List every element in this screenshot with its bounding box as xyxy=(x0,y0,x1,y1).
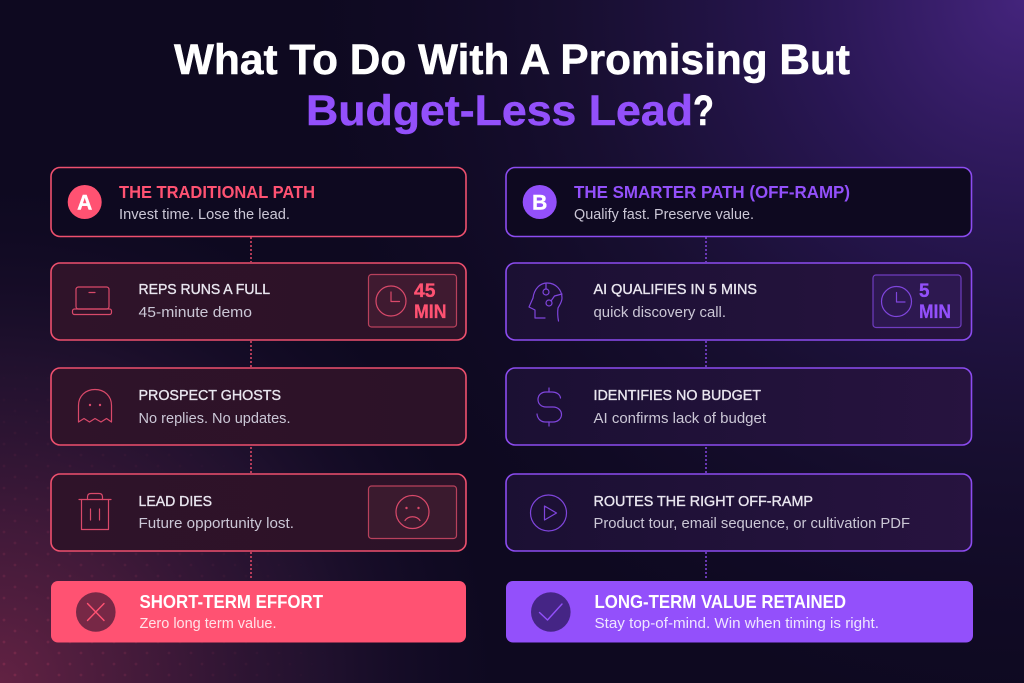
step: ai qualifies: quick discovery call. xyxy=(594,305,726,321)
step: lead dies: Future opportunity lost. xyxy=(138,516,294,532)
header: the traditional path: Invest time. Lose the lead. xyxy=(119,207,290,223)
step: prospect ghosts xyxy=(51,368,466,445)
icon: AI head xyxy=(529,283,562,321)
step: lead dies xyxy=(51,474,466,551)
step: ai qualifies: AI QUALIFIES IN 5 MINS xyxy=(594,282,757,298)
connectors: traditional path xyxy=(250,237,252,579)
title: Budget-Less Lead xyxy=(306,87,693,135)
step: lead dies: LEAD DIES xyxy=(138,494,212,510)
icon: dollar sign xyxy=(537,388,562,426)
icon: B badge: B xyxy=(532,192,547,214)
footer: long-term value retained: LONG-TERM VALUE RETAINED xyxy=(594,591,846,612)
panel: traditional path column xyxy=(51,168,466,642)
step: prospect ghosts: No replies. No updates. xyxy=(138,411,290,427)
icon: clock xyxy=(376,286,406,316)
step: routes the right off-ramp xyxy=(506,474,972,551)
icon: trash can xyxy=(79,494,111,530)
icon: A badge: A xyxy=(77,192,92,214)
footer: long-term value retained xyxy=(506,581,973,642)
header: the smarter path xyxy=(506,168,972,236)
icon: play button xyxy=(530,495,566,531)
panel: smarter path column xyxy=(506,168,973,642)
footer: long-term value retained: Stay top-of-mind. Win when timing is right. xyxy=(594,616,879,632)
icon: laptop xyxy=(72,287,112,314)
step: reps runs a full demo: 45-minute demo xyxy=(138,305,252,321)
step: identifies no budget: IDENTIFIES NO BUDGET xyxy=(594,388,761,404)
step: reps runs a full demo xyxy=(51,263,466,340)
icon: ghost xyxy=(78,390,112,422)
badge: 45 min: 45 xyxy=(414,281,436,302)
badge: 45 min xyxy=(368,274,456,327)
badge: sad face xyxy=(368,486,456,538)
header: the traditional path xyxy=(51,168,466,236)
footer: short-term effort: SHORT-TERM EFFORT xyxy=(140,591,324,612)
step: reps runs a full demo: REPS RUNS A FULL xyxy=(138,282,270,298)
icon: A badge xyxy=(68,185,102,219)
header: the traditional path: THE TRADITIONAL PATH xyxy=(119,182,315,202)
step: ai qualifies xyxy=(506,263,972,340)
header: the smarter path: Qualify fast. Preserve value. xyxy=(574,207,754,223)
step: identifies no budget xyxy=(506,368,972,445)
step: routes the right off-ramp: ROUTES THE RIGHT OFF-RAMP xyxy=(594,494,813,510)
connectors: smarter path xyxy=(705,237,707,579)
footer: short-term effort: Zero long term value. xyxy=(140,616,276,632)
title: What To Do With A Promising But xyxy=(174,36,850,84)
title: ? xyxy=(693,87,714,135)
badge: 45 min: MIN xyxy=(414,302,446,323)
footer: short-term effort xyxy=(51,581,466,642)
icon: check mark xyxy=(531,592,571,632)
badge: 5 min xyxy=(873,275,961,328)
header: the smarter path: THE SMARTER PATH (OFF-RAMP) xyxy=(574,182,850,202)
step: prospect ghosts: PROSPECT GHOSTS xyxy=(138,388,281,404)
title xyxy=(174,36,850,135)
icon: B badge xyxy=(523,185,557,219)
icon: clock xyxy=(882,286,912,316)
step: identifies no budget: AI confirms lack of budget xyxy=(594,411,766,427)
badge: 5 min: MIN xyxy=(919,302,951,323)
step: routes the right off-ramp: Product tour, email sequence, or cultivation PDF xyxy=(594,516,910,532)
badge: 5 min: 5 xyxy=(919,281,930,302)
icon: cross xyxy=(76,592,116,632)
